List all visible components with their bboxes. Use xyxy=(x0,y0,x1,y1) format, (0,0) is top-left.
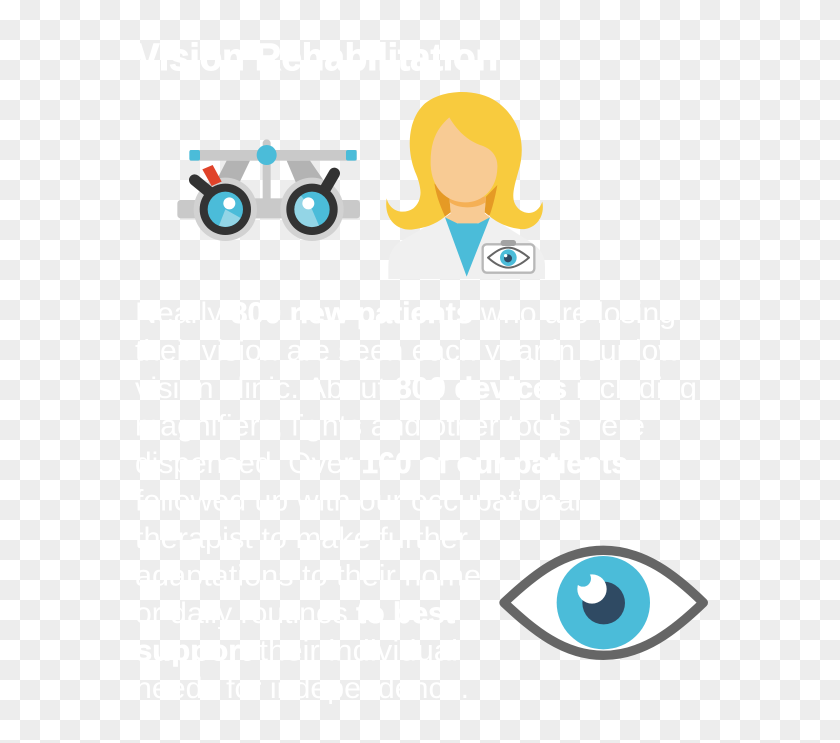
line 11: needs for independence. xyxy=(135,672,469,705)
line 6: followed up with our occupational xyxy=(135,484,581,518)
line 1: Nearly 800 new patients who are losing xyxy=(135,297,676,330)
neck xyxy=(445,197,490,224)
line 8: adaptations to their home xyxy=(135,560,481,592)
line 5: dispensed. Over 160 of our patients xyxy=(135,447,628,480)
line 10: support their individual xyxy=(135,634,458,668)
icon: large eye xyxy=(504,550,703,655)
white coat xyxy=(388,217,545,279)
hair shadow xyxy=(434,183,497,217)
hair xyxy=(386,92,543,230)
icon: trial lens frame glasses xyxy=(177,139,360,241)
title: Vision Rehabilitation xyxy=(135,37,498,79)
body text xyxy=(135,297,697,705)
eye badge xyxy=(483,240,534,273)
line 2: their vision are seen each year in our low xyxy=(135,334,680,368)
chin shadow xyxy=(449,197,486,207)
cyan shirt xyxy=(445,217,490,277)
icon: doctor with eye badge xyxy=(386,92,545,279)
line 7: therapist to make further xyxy=(135,522,468,555)
face xyxy=(431,117,497,202)
line 4: magnifiers, lights and other tools were xyxy=(135,410,645,442)
line 9: or daily routines to best xyxy=(135,597,455,630)
line 3: vision clinic. About 800 devices including xyxy=(135,372,697,405)
